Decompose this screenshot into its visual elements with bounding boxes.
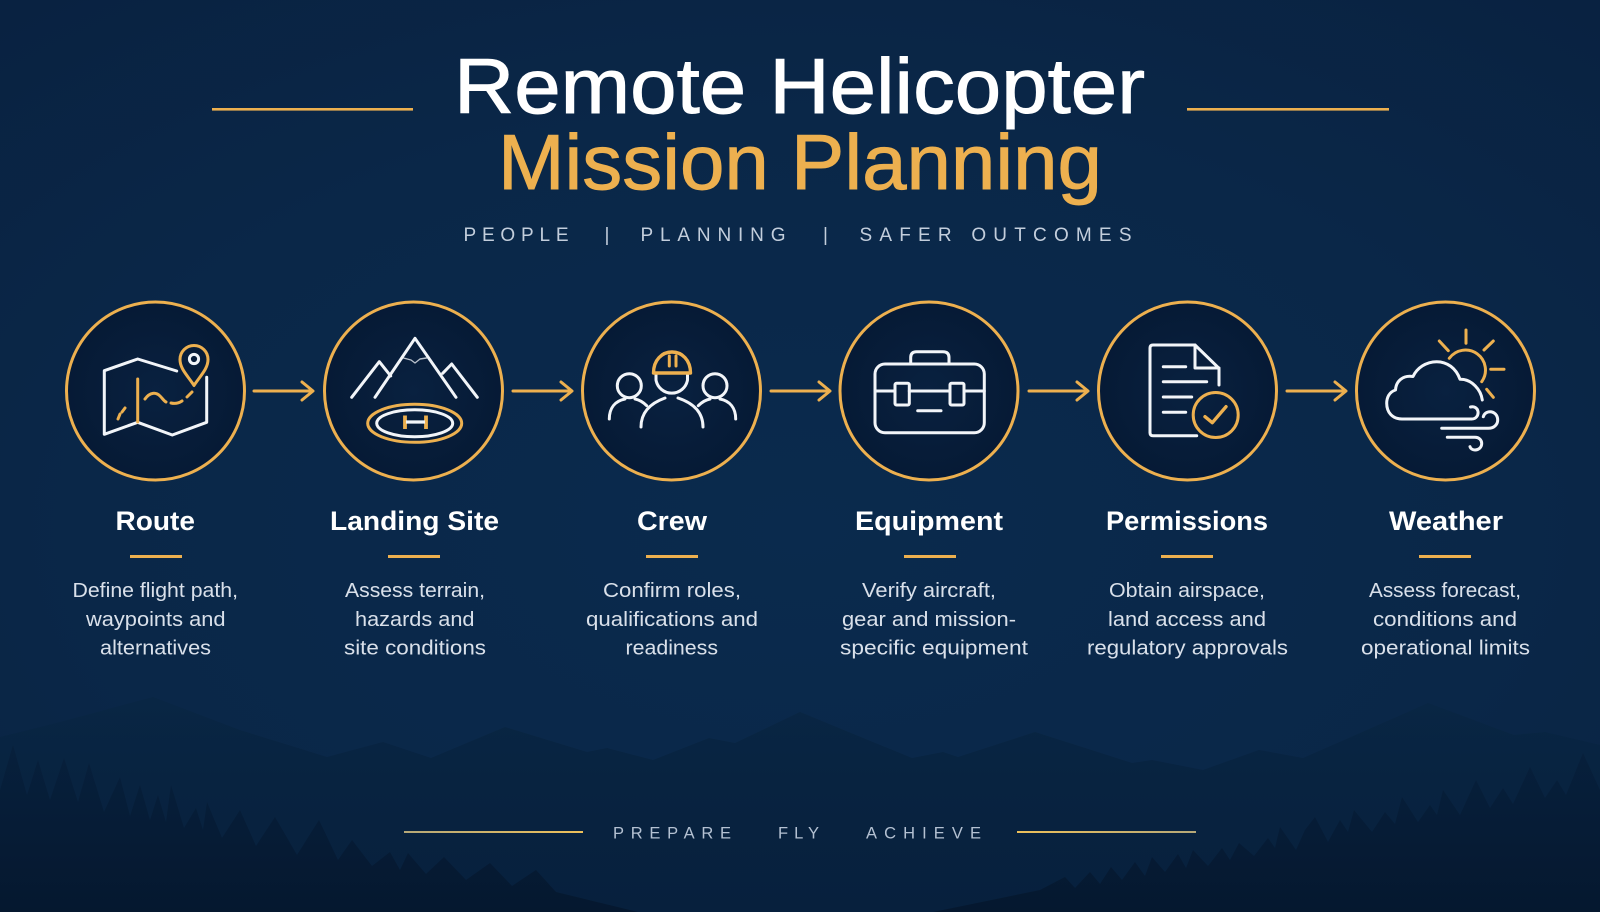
label: Crew: readiness — [626, 636, 718, 660]
icon: document with check — [1150, 345, 1238, 438]
label: Equipment — [840, 506, 1028, 660]
footer tagline: ACHIEVE — [866, 824, 981, 842]
label: Route: waypoints and — [85, 608, 226, 631]
label: Landing Site: hazards and — [355, 608, 474, 631]
icon: mountains and helipad — [352, 338, 477, 442]
circle: permissions — [1098, 302, 1276, 480]
subtitle: SAFER OUTCOMES — [860, 225, 1132, 246]
label: Landing Site: Landing Site — [330, 506, 499, 536]
label: Route: Route — [116, 506, 195, 536]
label: Permissions — [1087, 506, 1288, 660]
footer tagline: FLY — [778, 824, 819, 842]
subtitle: PLANNING — [640, 225, 786, 246]
footer tagline — [613, 824, 981, 842]
label: Route — [72, 506, 238, 660]
title: Mission Planning — [498, 118, 1102, 206]
subtitle — [464, 225, 1132, 246]
title — [454, 42, 1145, 206]
arrow 2 — [513, 382, 572, 400]
icon: cloud, sun and wind — [1387, 330, 1504, 450]
arrow 4 — [1029, 382, 1088, 400]
title rule left — [212, 108, 413, 111]
circle: weather — [1356, 302, 1534, 480]
label: Weather: Weather — [1389, 506, 1504, 536]
label: Crew: Crew — [637, 506, 708, 536]
icon: crew with helmet — [609, 352, 736, 427]
footer tagline: PREPARE — [613, 824, 731, 842]
icon: tool case — [875, 352, 984, 433]
step: Equipment — [840, 302, 1018, 480]
subtitle: | — [604, 225, 609, 246]
label: Permissions: Obtain airspace, — [1109, 579, 1265, 602]
label: Weather: operational limits — [1361, 636, 1530, 660]
label: Landing Site — [330, 506, 499, 660]
arrow 1 — [254, 382, 313, 400]
label: Equipment: Equipment — [855, 506, 1003, 536]
footer rule right — [1017, 831, 1196, 833]
circle: crew — [582, 302, 760, 480]
arrow 3 — [771, 382, 830, 400]
label: Equipment: Verify aircraft, — [862, 579, 996, 602]
label: Route: Define flight path, — [72, 579, 238, 602]
step: Crew — [582, 302, 760, 480]
circle: equipment — [840, 302, 1018, 480]
label: Crew — [586, 506, 758, 660]
step: Permissions — [1098, 302, 1276, 480]
label: Crew: qualifications and — [586, 608, 758, 631]
title rule right — [1187, 108, 1389, 111]
circle: route — [66, 302, 244, 480]
arrow 5 — [1287, 382, 1346, 400]
mountain silhouette — [0, 697, 1600, 912]
circle: landing site — [324, 302, 502, 480]
step: Weather — [1356, 302, 1534, 480]
label: Permissions: land access and — [1108, 608, 1266, 631]
label: Permissions: Permissions — [1106, 506, 1268, 536]
label: Permissions: regulatory approvals — [1087, 636, 1288, 660]
icon: map with pin — [104, 346, 208, 435]
label: Weather: conditions and — [1373, 608, 1517, 631]
label: Landing Site: site conditions — [344, 636, 486, 660]
right tree line — [933, 753, 1600, 912]
title: Remote Helicopter — [454, 42, 1145, 130]
footer rule left — [404, 831, 583, 833]
label: Equipment: specific equipment — [840, 636, 1028, 660]
label: Crew: Confirm roles, — [603, 579, 741, 602]
step: Route — [66, 302, 244, 480]
left tree line — [0, 745, 638, 912]
label: Weather: Assess forecast, — [1369, 579, 1521, 602]
subtitle: PEOPLE — [464, 225, 568, 246]
label: Weather — [1361, 506, 1530, 660]
subtitle: | — [823, 225, 828, 246]
label: Equipment: gear and mission- — [842, 608, 1016, 631]
step: Landing Site — [324, 302, 502, 480]
label: Landing Site: Assess terrain, — [345, 579, 485, 602]
label: Route: alternatives — [100, 636, 211, 660]
